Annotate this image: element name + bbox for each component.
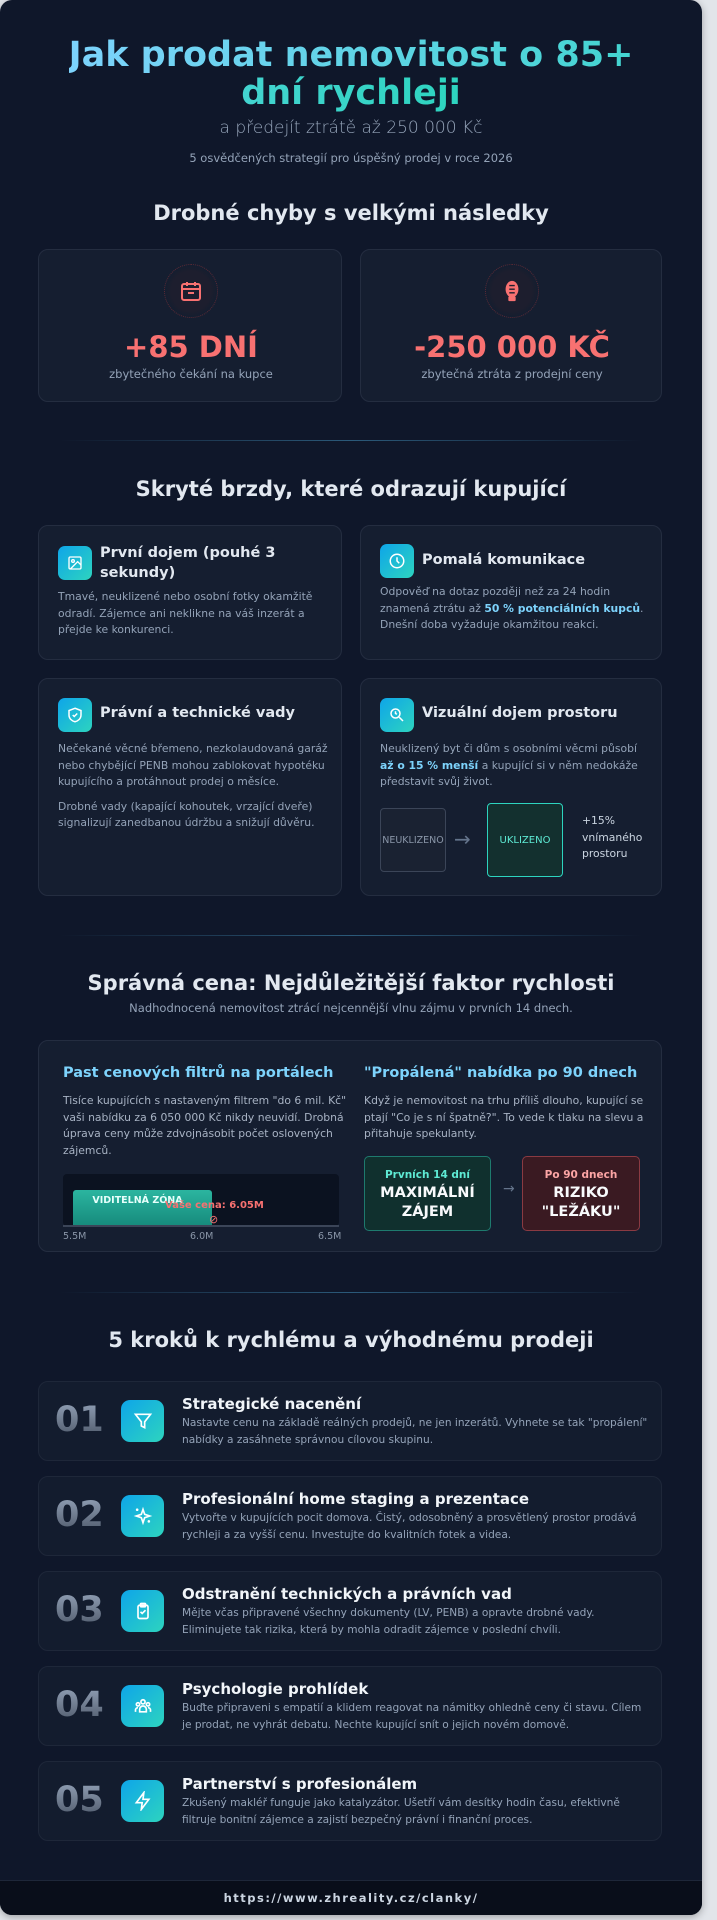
card text: Nečekané věcné břemeno, nezkolaudovaná garáž nebo chybějící PENB mohou zablokovat hypotéku kupujícího a protáhnout prodej o měsíce. <box>58 742 328 788</box>
label: prostoru <box>582 847 627 860</box>
step 01: Nastavte cenu na základě reálných prodejů, ne jen inzerátů. Vyhnete se tak "propálení" nabídky a zasáhnete správnou cílovou skupinu. <box>182 1417 647 1446</box>
box: first 14 days: Prvních 14 dní <box>385 1169 470 1181</box>
card text: Tmavé, neuklizené nebo osobní fotky okamžitě odradí. Zájemce ani neklikne na váš inzerát a přejde ke konkurenci. <box>58 590 312 636</box>
step 04: 04 <box>55 1685 104 1725</box>
tagline: 5 osvědčených strategií pro úspěšný prodej v roce 2026 <box>189 151 513 165</box>
panel: price <box>38 1040 662 1252</box>
card title: První dojem (pouhé 3 sekundy) <box>100 545 275 581</box>
stat number: +85 DNÍ <box>124 330 258 364</box>
label: +15% <box>582 814 615 827</box>
card title: Právní a technické vady <box>100 705 295 721</box>
icon: clock <box>380 544 414 578</box>
step 01: 01 <box>55 1400 104 1440</box>
step 05: Partnerství s profesionálem <box>182 1775 417 1793</box>
box: first 14 days: MAXIMÁLNÍ <box>380 1185 475 1201</box>
icon: filter <box>121 1400 164 1442</box>
card: pomalá komunikace <box>360 525 662 660</box>
right text: Když je nemovitost na trhu příliš dlouho, kupující se ptají "Co je s ní špatně?". To vede k tlaku na slevu a přitahuje spekulanty. <box>364 1094 643 1140</box>
left text: Tisíce kupujících s nastaveným filtrem "do 6 mil. Kč" vaši nabídku za 6 050 000 Kč nikdy neuvidí. Drobná úprava ceny může zdvojnásobit počet oslovených zájemců. <box>63 1094 346 1156</box>
step 02: 02 <box>55 1495 104 1535</box>
step 03: 03 <box>55 1590 104 1630</box>
card: vizuální dojem <box>360 678 662 896</box>
card: první dojem <box>38 525 342 660</box>
heading: drobné chyby: Drobné chyby s velkými následky <box>153 201 549 225</box>
stat card: days <box>38 249 342 402</box>
icon: calendar <box>164 264 218 318</box>
title: dní rychleji <box>241 73 461 113</box>
box: after 90 days: "LEŽÁKU" <box>542 1204 620 1220</box>
icon: search <box>380 698 414 732</box>
heading: skryté brzdy: Skryté brzdy, které odrazují kupující <box>136 477 566 501</box>
icon: lightning <box>121 1780 164 1822</box>
step 04 <box>38 1666 662 1746</box>
card text <box>58 742 328 829</box>
box: uklizeno: UKLIZENO <box>500 834 550 846</box>
card: právní vady <box>38 678 342 896</box>
chart: price filter: 6.5M <box>318 1231 341 1242</box>
heading: 5 kroků: 5 kroků k rychlému a výhodnému prodeji <box>108 1328 594 1352</box>
heading: správná cena: Správná cena: Nejdůležitější faktor rychlosti <box>88 971 614 995</box>
stat number: -250 000 KČ <box>414 330 610 364</box>
box: after 90 days <box>522 1156 640 1231</box>
stat caption: zbytečného čekání na kupce <box>109 367 273 381</box>
arrow: → <box>503 1181 515 1197</box>
step 04: Buďte připraveni s empatií a klidem reagovat na námitky ohledně ceny či stavu. Cílem je prodat, ne vyhrát debatu. Nechte kupující snít o jejich novém domově. <box>182 1702 641 1730</box>
step 01 <box>38 1381 662 1461</box>
step 05: Zkušený makléř funguje jako katalyzátor. Ušetří vám desítky hodin času, efektivně filtruje bonitní zájemce a zajistí bezpečný právní i finanční proces. <box>182 1797 620 1826</box>
box: first 14 days: ZÁJEM <box>402 1204 453 1220</box>
box: after 90 days: Po 90 dnech <box>545 1169 617 1181</box>
icon: image <box>58 546 92 580</box>
footer <box>0 1880 702 1915</box>
visible zone bar: VIDITELNÁ ZÓNA <box>92 1195 183 1206</box>
icon: sparkles <box>121 1495 164 1537</box>
label <box>582 814 642 860</box>
card title: Vizuální dojem prostoru <box>422 705 618 721</box>
chart: price filter <box>63 1174 341 1242</box>
footer: https://www.zhreality.cz/clanky/ <box>224 1891 478 1905</box>
step 02: Profesionální home staging a prezentace <box>182 1490 529 1508</box>
title: Jak prodat nemovitost o 85+ <box>69 35 633 75</box>
subtitle: a předejít ztrátě až 250 000 Kč <box>220 118 482 138</box>
chart: price filter: ⊘ <box>209 1213 218 1226</box>
card title: Pomalá komunikace <box>422 552 585 568</box>
icon: clipboard <box>121 1590 164 1632</box>
card text: Odpověď na dotaz později než za 24 hodin znamená ztrátu až 50 % potenciálních kupců. Dnešní doba vyžaduje okamžitou reakci. <box>380 585 643 631</box>
price marker: Vaše cena: 6.05M <box>165 1200 264 1211</box>
stat caption: zbytečná ztráta z prodejní ceny <box>421 367 603 381</box>
right title: "Propálená" nabídka po 90 dnech <box>364 1065 637 1081</box>
step 03: Mějte včas připravené všechny dokumenty (LV, PENB) a opravte drobné vady. Eliminujete tak rizika, která by mohla odradit zájemce v poslední chvíli. <box>182 1607 594 1636</box>
box: uklizeno <box>487 803 563 877</box>
step 05 <box>38 1761 662 1841</box>
box: after 90 days: RIZIKO <box>553 1185 609 1201</box>
title <box>69 35 633 113</box>
step 03 <box>38 1571 662 1651</box>
step 02 <box>38 1476 662 1556</box>
subheading: Nadhodnocená nemovitost ztrácí nejcennější vlnu zájmu v prvních 14 dnech. <box>129 1001 573 1015</box>
icon: people <box>121 1685 164 1727</box>
chart: price filter: 6.0M <box>190 1231 213 1242</box>
step 02: Vytvořte v kupujících pocit domova. Čistý, odosobněný a prosvětlený prostor prodává rychleji a za vyšší cenu. Investujte do kvalitních fotek a videa. <box>182 1512 637 1540</box>
box: neuklizeno <box>380 808 446 872</box>
card text: Neuklizený byt či dům s osobními věcmi působí až o 15 % menší a kupující si v něm nedokáže představit svůj život. <box>380 742 638 788</box>
icon: shield <box>58 698 92 732</box>
comparison diagram <box>380 803 642 877</box>
axis labels: 5.5M <box>63 1231 86 1242</box>
arrow: → <box>454 827 471 851</box>
box: first 14 days <box>364 1156 491 1231</box>
box: neuklizeno: NEUKLIZENO <box>382 834 444 846</box>
left title: Past cenových filtrů na portálech <box>63 1065 333 1081</box>
step 03: Odstranění technických a právních vad <box>182 1585 512 1603</box>
step 01: Strategické nacenění <box>182 1395 361 1413</box>
visible zone bar <box>73 1190 212 1226</box>
step 04: Psychologie prohlídek <box>182 1680 368 1698</box>
step 05: 05 <box>55 1780 104 1820</box>
icon: money <box>485 264 539 318</box>
card text: Drobné vady (kapající kohoutek, vrzající dveře) signalizují zanedbanou údržbu a snižují důvěru. <box>58 800 315 829</box>
label: vnímaného <box>582 830 642 844</box>
stat card: money <box>360 249 662 402</box>
